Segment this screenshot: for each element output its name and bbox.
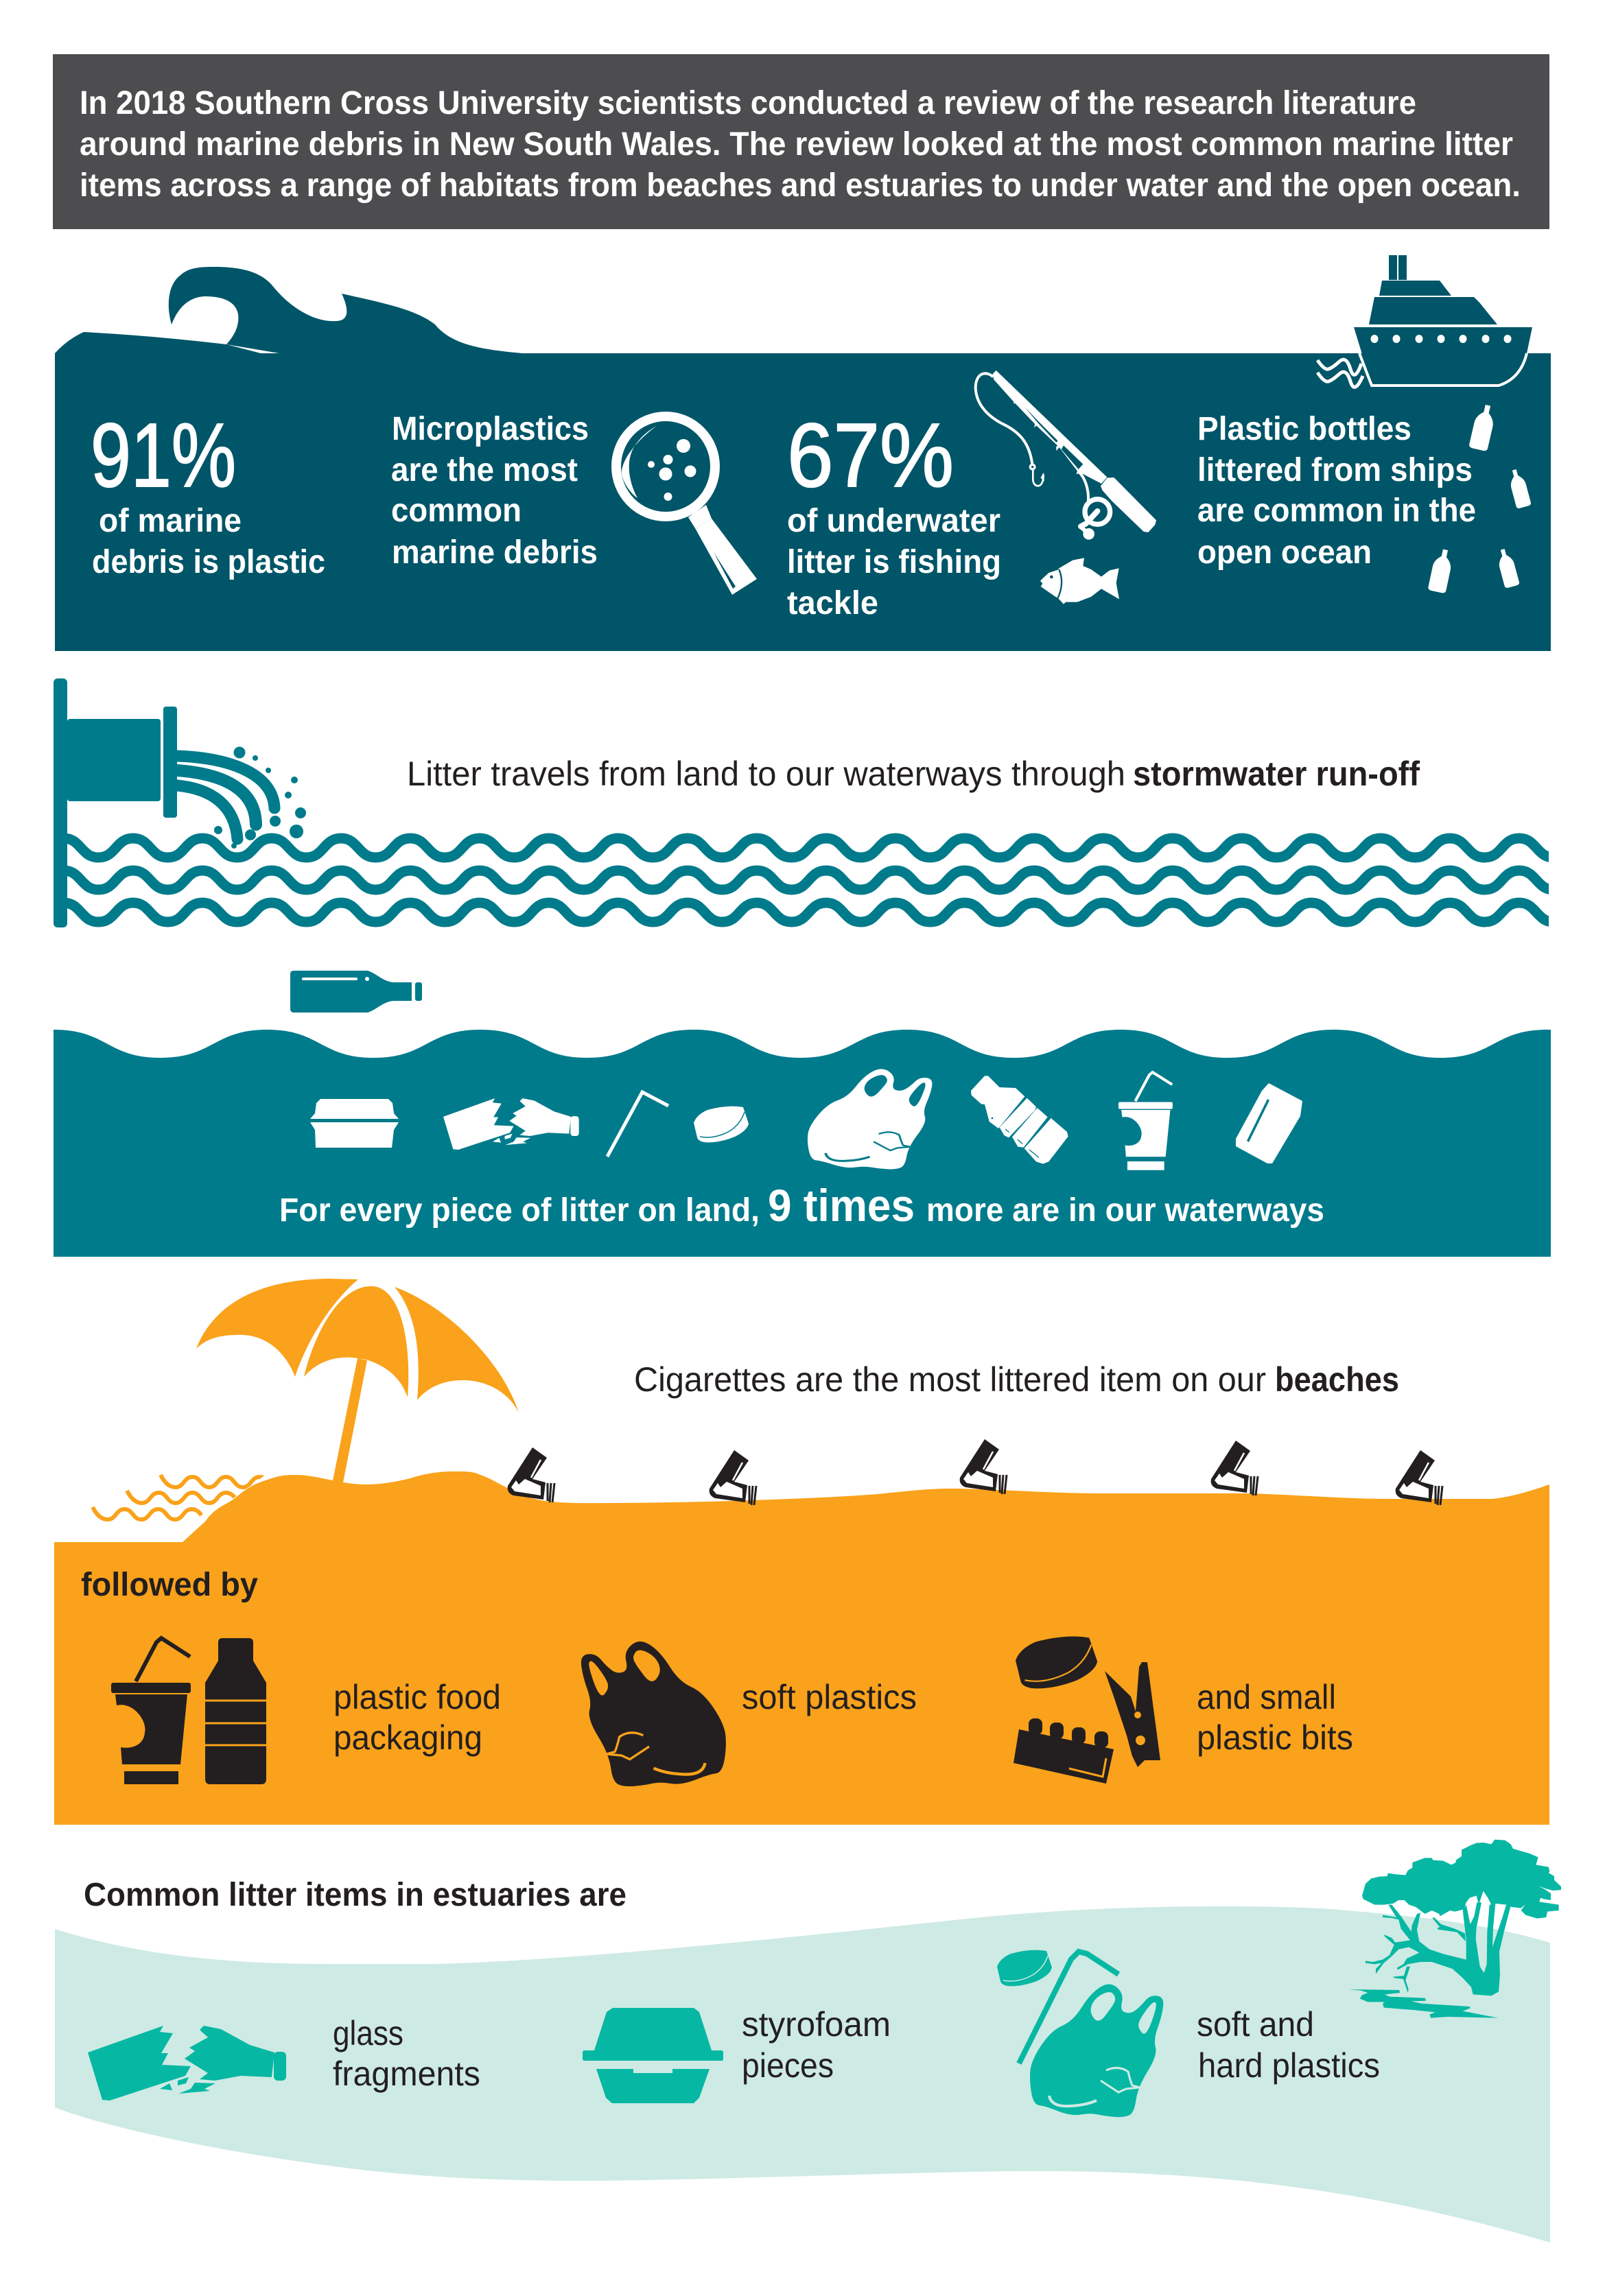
icon: glass fragments (88, 2026, 286, 2100)
stat: 91% (91, 405, 325, 580)
panel: litter in waterways (54, 1030, 1551, 1257)
text: small plastic bits: plastic bits (1197, 1718, 1353, 1757)
panel: estuaries (55, 1840, 1561, 2242)
intro text banner: In 2018 Southern Cross University scientists conducted a review of the research literature (80, 85, 1416, 121)
text: glass fragments (333, 2014, 480, 2093)
icon: plastic bottle (971, 1076, 1068, 1164)
intro text banner: items across a range of habitats from beaches and estuaries to under water and the open ocean. (80, 167, 1521, 204)
stat: 67%: 67% (787, 405, 954, 506)
small waves (93, 1475, 272, 1543)
panel: stormwater run-off (54, 678, 1589, 927)
icon: broken bottle (443, 1098, 579, 1150)
waves (64, 838, 1589, 922)
icon: cigarette butts (508, 1439, 1442, 1505)
stat: 91%: debris is plastic (92, 544, 325, 580)
icon: food container (310, 1099, 399, 1148)
text: plastic bottles (1197, 411, 1476, 571)
icon: bottle cap (694, 1106, 749, 1142)
icon: outfall pipe (54, 678, 306, 927)
stat: 67% (787, 405, 1001, 622)
text: microplastics: are the most (391, 452, 578, 488)
stat: 67%: litter is fishing (787, 544, 1001, 580)
icon: fish (1040, 558, 1119, 604)
text: soft and hard plastics (1197, 2005, 1380, 2085)
icon: plastic bag (808, 1069, 932, 1169)
text: stormwater: stormwater run-off (1133, 755, 1420, 793)
water background (54, 1030, 1551, 1257)
text: styrofoam pieces: pieces (742, 2046, 834, 2085)
text: plastic bottles: Plastic bottles (1197, 411, 1411, 447)
icon: ship (1317, 255, 1532, 387)
icon: beach umbrella (196, 1279, 519, 1482)
icon: small plastic bits (1014, 1637, 1160, 1784)
text: stormwater: Litter travels from land to our waterways through (407, 755, 1125, 793)
icon: mangrove tree (1349, 1840, 1561, 2018)
icon: floating bottle (290, 971, 422, 1013)
text: cigarettes: beaches (1275, 1360, 1399, 1399)
icon: cup (1118, 1072, 1173, 1170)
icon: black bag (581, 1642, 726, 1786)
stat: 67%: tackle (787, 585, 878, 622)
text: small plastic bits: and small (1197, 1678, 1336, 1716)
heading: estuaries: Common litter items in estuaries are (84, 1877, 626, 1913)
icon: floating bottles (1428, 403, 1532, 593)
text: nine times: more are in our waterways (926, 1192, 1324, 1229)
estuary background (55, 1906, 1550, 2242)
stat: 91%: of marine (99, 503, 242, 539)
text: cigarettes: Cigarettes are the most littered item on our (634, 1360, 1266, 1399)
icon: cup and bottle (111, 1638, 266, 1784)
panel: beaches (54, 1279, 1549, 1825)
text: plastic bottles: are common in the (1197, 493, 1476, 529)
panel: marine debris statistics (55, 255, 1551, 651)
text: nine times: 9 times (768, 1180, 915, 1231)
text: plastic food packaging: packaging (333, 1718, 482, 1757)
heading: followed by: followed by (81, 1567, 258, 1603)
text: microplastics: common (391, 493, 522, 529)
icon: soft and hard plastics (997, 1950, 1163, 2117)
text: styrofoam pieces (742, 2005, 891, 2085)
text: glass fragments: glass (333, 2014, 403, 2052)
text: nine times (279, 1180, 1324, 1231)
text: soft and hard plastics: hard plastics (1198, 2046, 1380, 2085)
text: glass fragments: fragments (333, 2055, 480, 2093)
text: plastic food packaging (333, 1678, 501, 1757)
stat: 67%: of underwater (787, 503, 1000, 539)
stat: 91%: 91% (91, 405, 236, 506)
text: plastic bottles: littered from ships (1197, 452, 1473, 488)
panel background with wave (55, 267, 1551, 651)
text: soft plastics: soft plastics (742, 1678, 917, 1716)
icon: magnifying glass (616, 416, 757, 595)
intro text banner: around marine debris in New South Wales. The review looked at the most common marine litter (80, 126, 1513, 163)
text: nine times: For every piece of litter on land, (279, 1192, 760, 1229)
icon: styrofoam container (583, 2008, 723, 2103)
text: plastic bottles: open ocean (1197, 534, 1372, 571)
text: microplastics: marine debris (392, 534, 598, 571)
icon: fishing rod (976, 370, 1156, 540)
sand background (54, 1471, 1549, 1825)
icon: straw (607, 1092, 668, 1157)
text: small plastic bits (1197, 1678, 1353, 1757)
text: microplastics: Microplastics (392, 411, 589, 447)
text: styrofoam pieces: styrofoam (742, 2005, 891, 2044)
icon: drink can (1236, 1083, 1302, 1163)
intro text banner (53, 54, 1549, 229)
text: soft and hard plastics: soft and (1197, 2005, 1314, 2044)
text: plastic food packaging: plastic food (333, 1678, 501, 1716)
text: microplastics (391, 411, 598, 571)
